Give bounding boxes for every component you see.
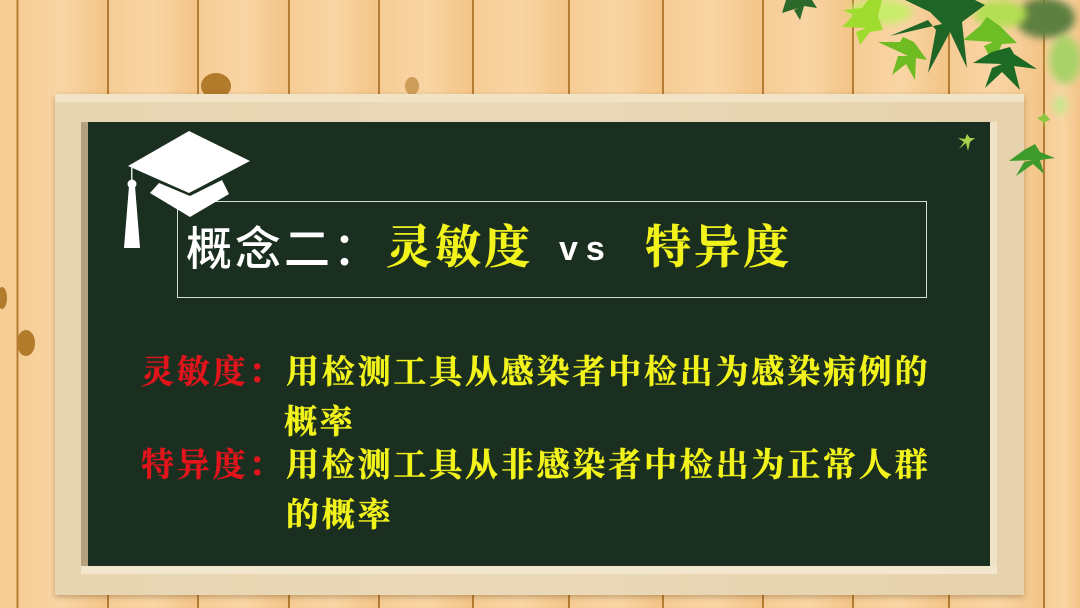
icon: graduation cap	[124, 131, 250, 248]
leaf: right dark	[973, 47, 1037, 90]
frame top highlight	[55, 94, 1024, 102]
leaf: top left dark	[782, 0, 817, 20]
heading: sensitivity: 灵敏度	[386, 222, 533, 273]
decoration: maple leaves	[782, 0, 1080, 176]
leaf: mid green	[878, 37, 927, 80]
leaf: large dark center	[890, 0, 985, 73]
heading: vs: vs	[559, 230, 613, 268]
leaf: right bright	[963, 17, 1017, 63]
frame bottom lip	[81, 566, 997, 574]
heading: concept two: 概念二：	[186, 223, 382, 275]
definition text: sensitivity line 2: 概率	[284, 405, 356, 441]
heading: specificity: 特异度	[645, 222, 792, 273]
definition text: specificity line 1: 用检测工具从非感染者中检出为正常人群	[286, 448, 930, 484]
chalkboard panel	[88, 122, 990, 566]
definition label: specificity: 特异度：	[141, 448, 284, 484]
definition text: sensitivity line 1: 用检测工具从感染者中检出为感染病例的	[286, 355, 930, 391]
leaf: light green left	[842, 0, 883, 45]
title box	[177, 201, 927, 298]
definition label: sensitivity: 灵敏度：	[141, 355, 284, 391]
leaf: small on board	[958, 134, 975, 151]
leaf: tiny	[1037, 113, 1050, 127]
blurred background foliage	[848, 0, 1080, 115]
wooden blackboard frame	[55, 94, 1024, 595]
definition text: specificity line 2: 的概率	[286, 498, 393, 534]
leaf: lower right	[1009, 144, 1055, 176]
